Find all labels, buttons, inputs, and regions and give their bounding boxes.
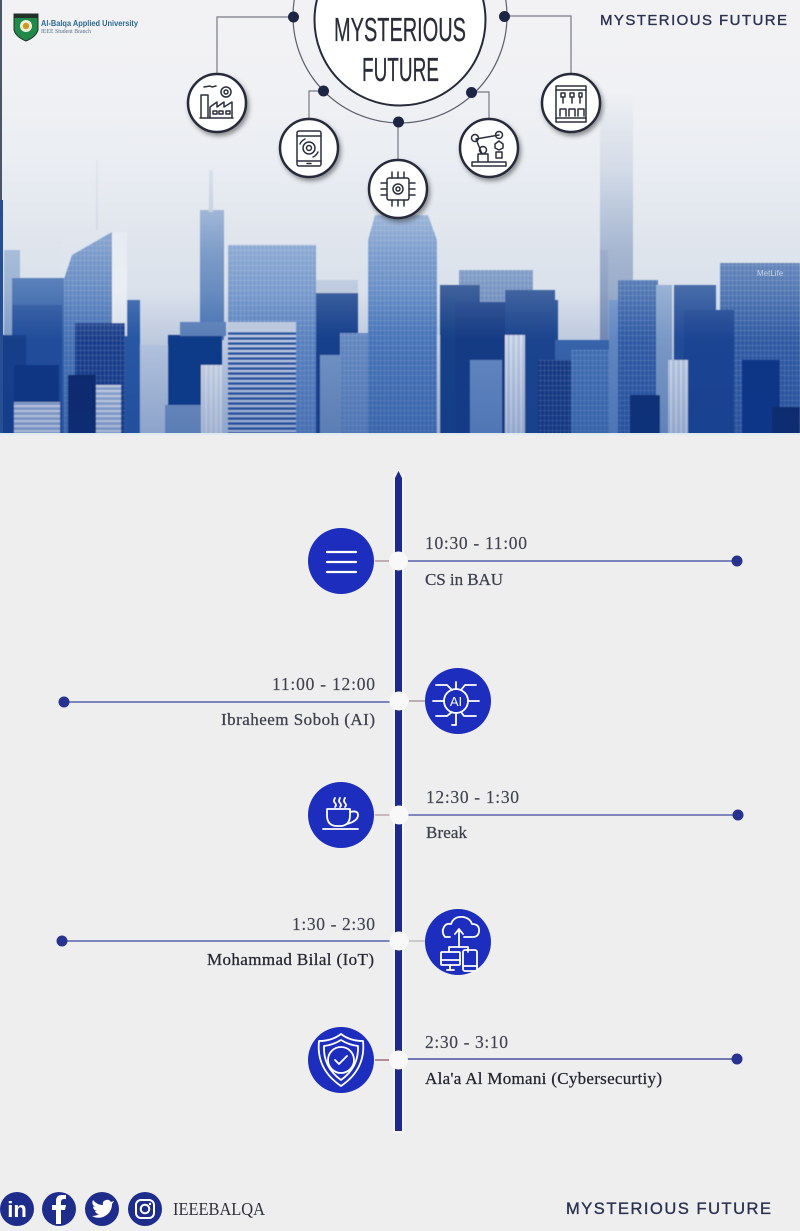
icon: shield	[308, 1027, 374, 1093]
session 5: Cybersecurity: Ala'a Al Momani (Cybersecurtiy)	[425, 1069, 662, 1088]
icon: AI circuit	[425, 668, 491, 734]
brand wordmark bottom right: MYSTERIOUS FUTURE	[566, 1200, 771, 1218]
session 4: Mohammad Bilal (IoT): Mohammad Bilal (IoT)	[207, 950, 374, 969]
title: MYSTERIOUS	[334, 11, 466, 48]
session 3: Break: 12:30 - 1:30	[426, 787, 519, 807]
hero: foggy city skyline: MetLife	[757, 269, 784, 278]
session 1: CS in BAU	[308, 528, 742, 594]
icon: AI circuit: AI	[450, 694, 462, 709]
fill between towers	[125, 300, 140, 434]
icon: twitter	[85, 1192, 119, 1226]
session 4: Mohammad Bilal (IoT): 1:30 - 2:30	[292, 914, 375, 934]
brand wordmark top right: MYSTERIOUS FUTURE	[600, 12, 787, 29]
logo: Al-Balqa Applied University	[14, 14, 138, 41]
session 2: Ibraheem Soboh (AI): Ibraheem Soboh (AI)	[221, 710, 375, 729]
title: FUTURE	[362, 51, 439, 88]
session 3: Break	[308, 782, 744, 848]
right cluster	[459, 270, 533, 310]
icon: cloud and devices	[425, 909, 491, 975]
session 1: CS in BAU: CS in BAU	[425, 570, 503, 589]
icon: instagram	[128, 1192, 162, 1226]
icon: factory	[188, 74, 246, 132]
social handle: IEEEBALQA	[173, 1199, 265, 1219]
session 2: Ibraheem Soboh (AI): 11:00 - 12:00	[272, 674, 375, 694]
hub: title circle, ring and connectors	[217, 0, 571, 160]
icon: linkedin: in	[7, 1197, 27, 1222]
logo: Al-Balqa Applied University: Al-Balqa Applied University	[41, 18, 138, 28]
timeline spine	[393, 471, 404, 1133]
session 2: Ibraheem Soboh (AI)	[58, 668, 491, 734]
icon: coffee cup	[308, 782, 374, 848]
icon: phone with gear	[280, 119, 338, 177]
icon: facebook	[42, 1192, 76, 1226]
icon: menu	[308, 528, 374, 594]
icon: chip with gear	[369, 160, 427, 218]
back towers	[600, 95, 633, 355]
social icons	[0, 1192, 162, 1226]
central empire tower	[368, 215, 437, 434]
session 5: Cybersecurity: 2:30 - 3:10	[425, 1032, 508, 1052]
session 5: Cybersecurity	[308, 1027, 742, 1093]
icon: robot arm	[460, 119, 518, 177]
logo: Al-Balqa Applied University: IEEE Student Branch	[41, 28, 92, 35]
session 1: CS in BAU: 10:30 - 11:00	[425, 533, 527, 553]
icon: linkedin	[0, 1192, 34, 1226]
session 3: Break: Break	[426, 823, 468, 842]
left glass tower	[62, 232, 125, 434]
session 4: Mohammad Bilal (IoT)	[56, 909, 491, 975]
icon: automation panel	[542, 74, 600, 132]
mid towers	[228, 245, 316, 434]
hero: foggy city skyline	[0, 0, 800, 435]
title	[314, 0, 486, 106]
